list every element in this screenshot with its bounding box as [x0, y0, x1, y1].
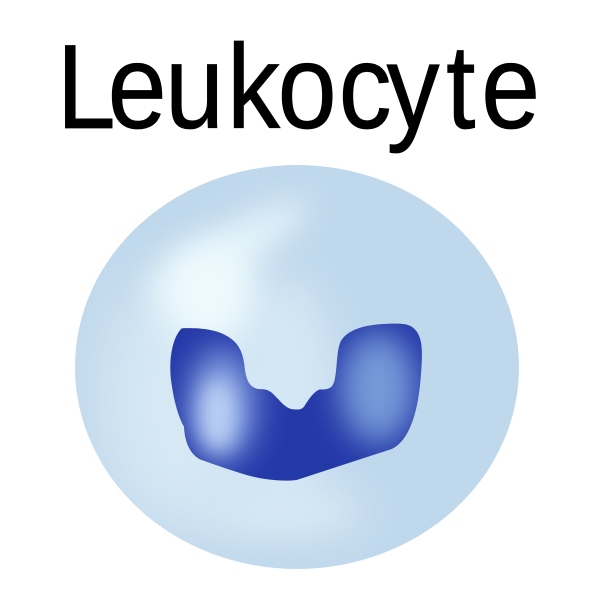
- infographic: leukocyte diagram: [65, 40, 536, 569]
- cytoplasm highlight, lower: [205, 486, 365, 538]
- cytoplasm soft shading, left: [92, 284, 241, 532]
- title: Leukocyte: [57, 20, 540, 154]
- nucleus left highlight: [200, 379, 236, 451]
- cytoplasm highlight, core: [162, 245, 254, 345]
- nucleus left halo: [188, 347, 256, 463]
- cell body: [75, 165, 519, 569]
- cytoplasm soft shading, centre: [260, 278, 337, 482]
- nucleus right highlight: [340, 332, 416, 444]
- cytoplasm highlight band, top: [184, 195, 308, 274]
- nucleus: [170, 324, 422, 481]
